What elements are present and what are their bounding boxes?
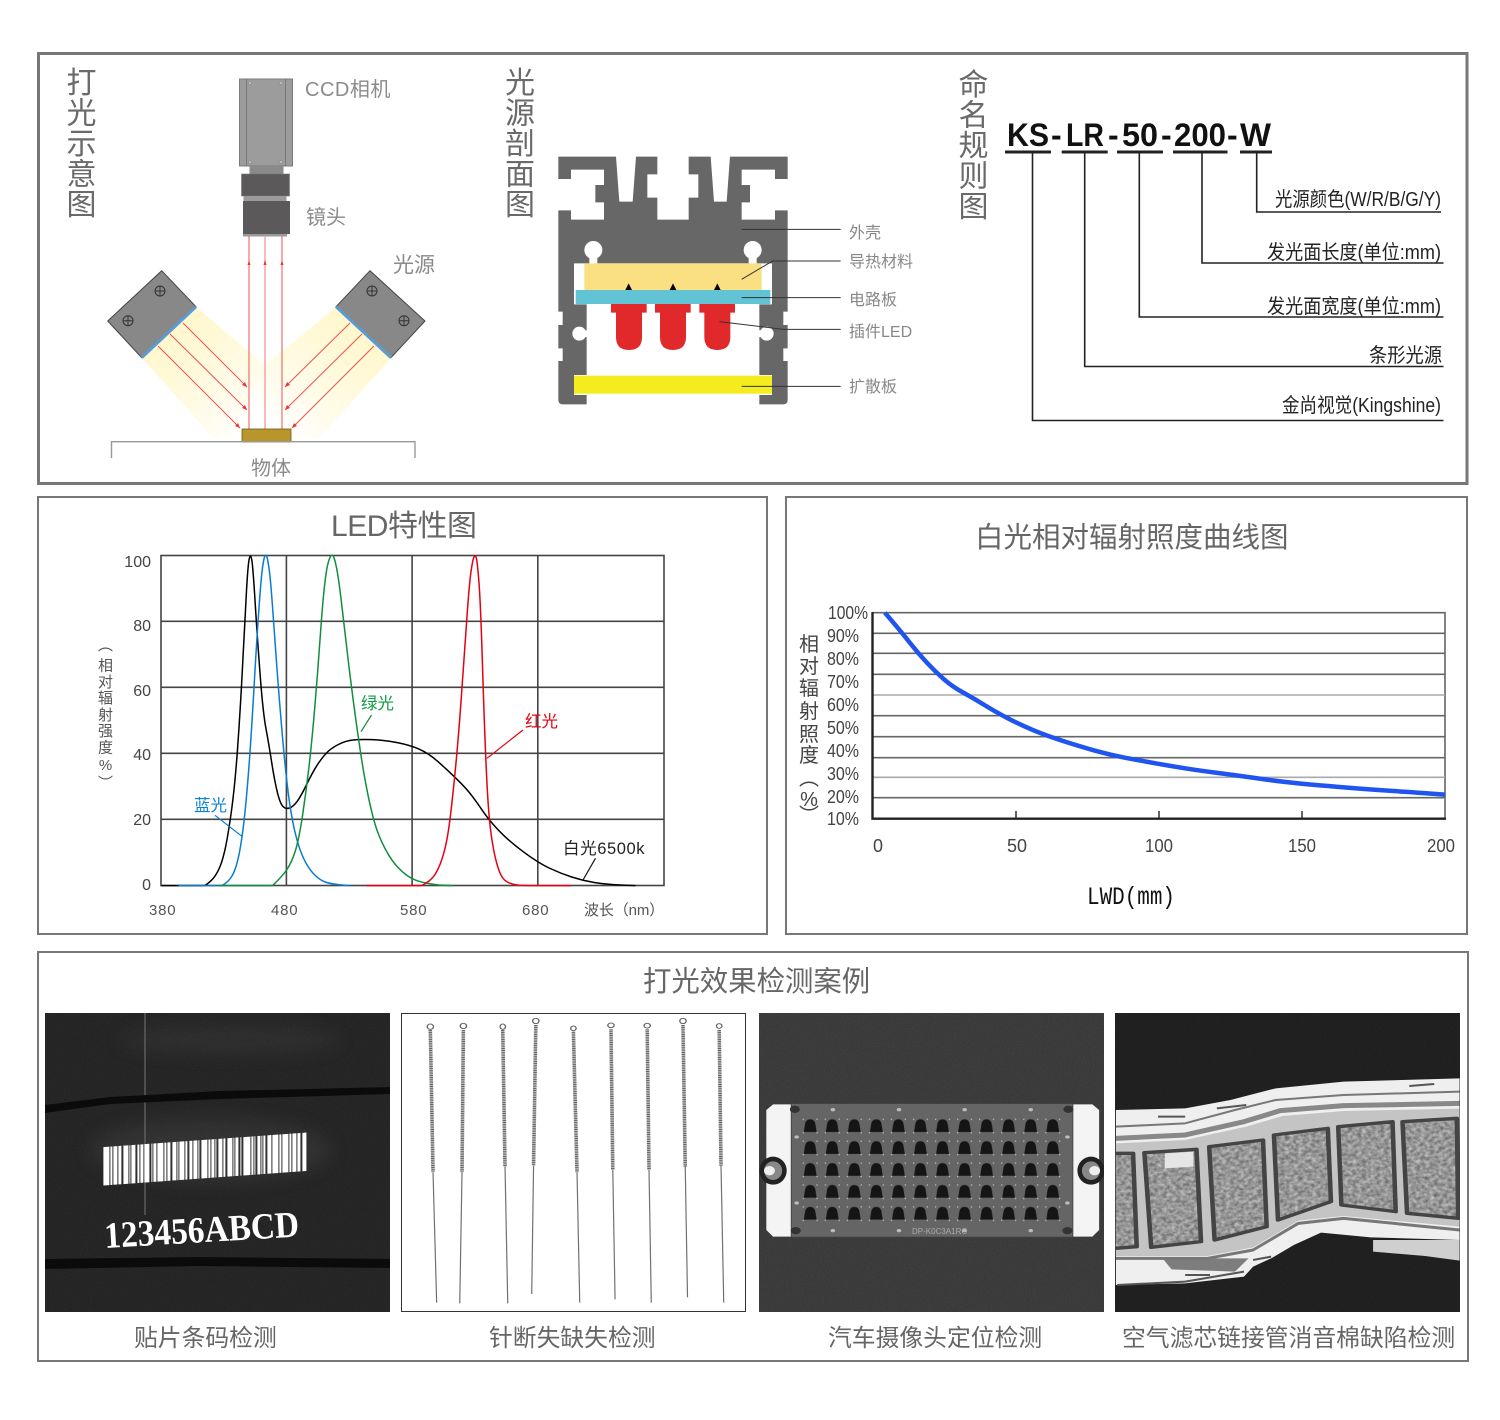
photo: barcode: 123456ABCD: [103, 1204, 300, 1257]
heading: light source section: 光源剖面图: [505, 67, 535, 222]
y axis percent labels: 20%: [827, 787, 859, 807]
x axis title: LWD(mm): [1087, 883, 1175, 912]
y axis percent labels: 10%: [827, 809, 859, 829]
model underlines and leaders: [1005, 152, 1444, 420]
y axis percent labels: 70%: [827, 672, 859, 692]
x axis numbers: 波长（nm）: [584, 902, 665, 919]
cross-section drawing: [558, 157, 841, 404]
label: light source: 光源: [393, 254, 435, 277]
x axis numbers: [149, 902, 665, 919]
y axis percent labels: 90%: [827, 626, 859, 646]
x axis numbers: 50: [1007, 836, 1027, 856]
model code: 200: [1174, 117, 1226, 153]
heading: lighting diagram: 打光示意图: [66, 67, 96, 222]
x axis numbers: 100: [1145, 836, 1173, 856]
object block: [242, 429, 291, 442]
model code: W: [1240, 117, 1272, 153]
y axis title: ︵相对辐射强度%︶: [98, 637, 113, 792]
label: white 6500k: 白光6500k: [563, 839, 645, 858]
icon: left lamp: [108, 271, 196, 358]
caption: needles: 针断失缺失检测: [489, 1325, 656, 1352]
y axis percent labels: 30%: [827, 764, 859, 784]
y axis numbers: 20: [133, 812, 151, 829]
y axis numbers: [124, 554, 151, 894]
chart grid: [161, 555, 664, 886]
x axis numbers: 680: [522, 902, 549, 919]
label: object: 物体: [251, 457, 291, 480]
panel: white light curve: [786, 497, 1467, 934]
section labels: 扩散板: [849, 378, 897, 396]
icon: right lamp: [336, 271, 425, 358]
y axis percent labels: 50%: [827, 718, 859, 738]
model code: -: [1108, 117, 1119, 153]
naming labels: 发光面长度(单位:mm): [1267, 241, 1441, 264]
panel title: 打光效果检测案例: [643, 966, 870, 998]
section labels: 插件LED: [849, 323, 912, 341]
y axis numbers: 80: [133, 618, 151, 635]
chart title: 白光相对辐射照度曲线图: [975, 522, 1289, 554]
callout leaders: [215, 715, 596, 880]
light rays: [158, 236, 374, 429]
model code: 50: [1122, 117, 1158, 153]
photo: camera fixture: DP-K0C3A1RC: [912, 1227, 967, 1236]
y axis numbers: 0: [142, 877, 151, 894]
y axis numbers: 40: [133, 747, 151, 764]
caption: barcode: 贴片条码检测: [134, 1325, 277, 1352]
y axis percent labels: 40%: [827, 741, 859, 761]
naming labels: 金尚视觉(Kingshine): [1282, 394, 1441, 417]
model code: [1007, 117, 1272, 153]
label: CCD camera: CCD相机: [305, 78, 391, 101]
x axis numbers: 150: [1288, 836, 1316, 856]
y axis percent labels: 100%: [828, 603, 868, 623]
chart title: LED特性图: [331, 510, 477, 543]
label: blue: 蓝光: [194, 796, 227, 815]
object table: [112, 442, 415, 458]
x axis numbers: 480: [271, 902, 298, 919]
y axis percent labels: 80%: [827, 649, 859, 669]
photo: barcode: [45, 1013, 390, 1312]
photo: camera fixture: [759, 1013, 1105, 1312]
label: lens: 镜头: [306, 206, 346, 229]
curve: irradiance: [885, 613, 1445, 795]
naming labels: 条形光源: [1369, 344, 1442, 367]
label: green: 绿光: [361, 694, 394, 713]
section labels: 外壳: [849, 224, 881, 242]
y axis percent labels: [827, 603, 868, 829]
y axis numbers: 100: [124, 554, 151, 571]
icon: CCD camera: [240, 79, 292, 236]
model code: -: [1161, 117, 1172, 153]
x axis numbers: 380: [149, 902, 176, 919]
model code: -: [1227, 117, 1238, 153]
section labels: [849, 224, 913, 396]
curve: blue light: [178, 555, 350, 886]
x axis numbers: [873, 836, 1455, 856]
naming labels: 发光面宽度(单位:mm): [1267, 295, 1441, 318]
panel: inspection examples: [38, 952, 1468, 1361]
panel: LED chart: [38, 497, 767, 934]
curve: white light: [161, 556, 636, 886]
naming labels: 光源颜色(W/R/B/G/Y): [1275, 188, 1441, 211]
x axis numbers: 0: [873, 836, 883, 856]
section labels: 导热材料: [849, 253, 913, 271]
x axis numbers: 200: [1427, 836, 1455, 856]
x axis numbers: 580: [400, 902, 427, 919]
model code: KS: [1007, 117, 1049, 153]
model code: -: [1051, 117, 1062, 153]
photo: needles: [402, 1014, 746, 1312]
photo: air filter: [1115, 1013, 1460, 1312]
caption: camera positioning: 汽车摄像头定位检测: [828, 1325, 1042, 1352]
heading: naming rules: 命名规则图: [958, 69, 988, 224]
naming labels: [1267, 188, 1442, 417]
y axis numbers: 60: [133, 683, 151, 700]
chart grid: [872, 612, 1446, 819]
model code: LR: [1066, 117, 1104, 153]
section labels: 电路板: [849, 291, 897, 309]
y axis percent labels: 60%: [827, 695, 859, 715]
caption: air filter: 空气滤芯链接管消音棉缺陷检测: [1122, 1325, 1455, 1352]
curve: red light: [367, 556, 571, 886]
y axis title: 相对辐射照度︵%︶: [799, 633, 819, 827]
light beams: [142, 307, 391, 438]
panel: top diagrams: [38, 54, 1467, 484]
label: red: 红光: [525, 712, 558, 731]
curve: green light: [218, 555, 453, 886]
